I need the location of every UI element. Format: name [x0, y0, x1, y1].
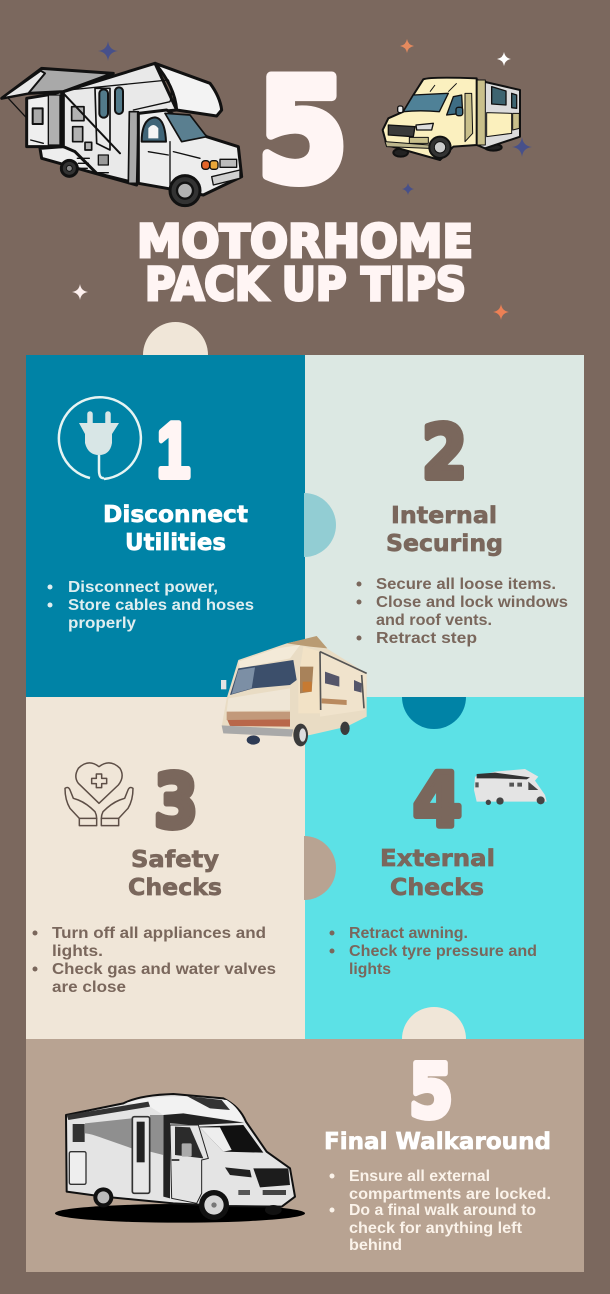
- illustration: vintage watercolor motorhome: [221, 636, 367, 746]
- bullet list: Disconnect power,: [68, 579, 218, 596]
- tab: beige semicircle above panels: [143, 322, 208, 355]
- bullet list: compartments are locked.: [349, 1186, 551, 1203]
- heading: [386, 503, 503, 557]
- heading: External: [380, 846, 495, 872]
- panel: step 3 safety checks: [26, 697, 305, 1039]
- tab: light teal semicircle: [304, 493, 336, 557]
- panel: step 4 external checks: [304, 697, 584, 1039]
- title: Motorhome Pack Up Tips: PACK UP TIPS: [145, 258, 466, 311]
- bullet list: are close: [52, 979, 126, 996]
- icon: power plug: [59, 397, 141, 479]
- heading: Securing: [386, 531, 503, 557]
- illustration: class C motorhome with awning: [2, 63, 242, 206]
- tab: beige semicircle: [402, 1007, 466, 1039]
- number 2: 2: [422, 410, 467, 496]
- heading: Checks: [390, 875, 484, 901]
- bullet list: lights: [349, 961, 391, 978]
- heading: [103, 502, 248, 556]
- bullet list: Retract awning.: [349, 925, 468, 942]
- title: Motorhome Pack Up Tips: MOTORHOME: [137, 215, 473, 268]
- heading: [380, 846, 495, 901]
- panel: step 1 disconnect utilities: [26, 355, 305, 697]
- bullet list: Secure all loose items.: [376, 576, 556, 593]
- number 5: 5: [409, 1049, 453, 1135]
- bullet list: [330, 925, 537, 978]
- bullet list: behind: [349, 1237, 402, 1254]
- title number 5: 5: [257, 49, 348, 214]
- heading: Utilities: [125, 530, 226, 556]
- bullet list: Ensure all external: [349, 1168, 490, 1185]
- tab: tan semicircle: [304, 836, 336, 900]
- decorative stars: [72, 39, 532, 320]
- heading: [128, 847, 222, 901]
- bullet list: properly: [68, 615, 136, 632]
- bullet list: Store cables and hoses: [68, 597, 254, 614]
- bullet list: [48, 579, 254, 632]
- number 3: 3: [154, 759, 198, 845]
- number 4: 4: [413, 758, 462, 844]
- bullet list: [32, 925, 276, 996]
- heading: Internal: [391, 503, 497, 529]
- bullet list: Retract step: [376, 630, 477, 647]
- number 1: 1: [157, 406, 190, 494]
- icon: heart in hands: [65, 763, 133, 826]
- bullet list: check for anything left: [349, 1220, 522, 1237]
- heading: Checks: [128, 875, 222, 901]
- panel: step 2 internal securing: [304, 355, 584, 697]
- bullet list: [356, 576, 568, 647]
- title: Motorhome Pack Up Tips: [137, 215, 473, 311]
- tab: dark teal semicircle: [402, 697, 466, 729]
- bullet list: Turn off all appliances and: [52, 925, 266, 942]
- illustration: large silver motorhome: [55, 1094, 305, 1223]
- bullet list: Check gas and water valves: [52, 961, 276, 978]
- illustration: small white motorhome: [474, 769, 547, 805]
- heading: Safety: [131, 847, 219, 873]
- illustration: cream van: [383, 78, 520, 160]
- bullet list: Do a final walk around to: [349, 1202, 536, 1219]
- bullet list: [330, 1168, 551, 1254]
- heading: Disconnect: [103, 502, 248, 528]
- bullet list: Close and lock windows: [376, 594, 568, 611]
- bullet list: Check tyre pressure and: [349, 943, 537, 960]
- heading: Final Walkaround: [324, 1129, 551, 1155]
- bullet list: lights.: [52, 943, 103, 960]
- bullet list: and roof vents.: [376, 612, 492, 629]
- panel: step 5 final walkaround: [26, 1039, 584, 1272]
